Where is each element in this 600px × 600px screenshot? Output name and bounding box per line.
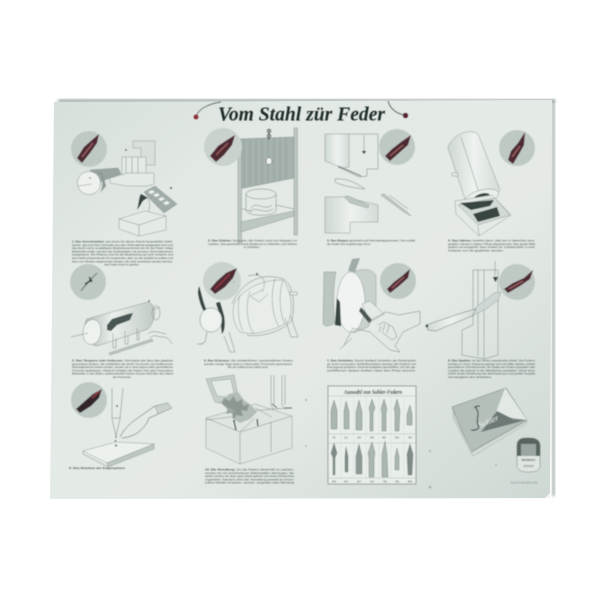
nib labels row 2: 800	[408, 480, 413, 484]
nib row 1	[331, 399, 412, 431]
caption 3: die Feder ihre kuppförmige Form.	[327, 242, 371, 246]
caption 6: werden einige Tage lang in rotierenden Trommeln geschauert.	[204, 362, 293, 366]
product box	[452, 388, 527, 456]
caption 5: gewordene Federn, die schließlich die durch Trommeln mit Gelbbrenner	[72, 362, 173, 366]
caption 8: Genauigkeit des Arbeiters.	[448, 375, 492, 379]
caption 1: 1. Das Ausschneiden: aus einem für diesen Zweck hergestellten Stahl-	[72, 240, 173, 244]
printer's imprint: Druck: Federnfabrik 1951	[511, 482, 539, 484]
caption 7: an hoch tourenden Schleifscheiben werden die Federn zur	[327, 362, 416, 366]
caption 1: Elastizität erhält, werden die Federplatten mit grossen Schneidpressen	[72, 249, 173, 253]
nib labels row 1: 300	[370, 436, 375, 440]
caption 7: schliffenen Spitze Aufbei nach den Prise kommt.	[327, 368, 416, 372]
chart: Auswahl von Sohler-Federn	[328, 386, 416, 484]
caption 8	[448, 358, 535, 379]
caption 10: edlem Metall versehen, worauf, vergoldet oder Messing	[205, 481, 294, 485]
caption 1: aus Feder Kopf zu gießen.	[104, 263, 140, 267]
nib labels row 1: 120	[357, 436, 362, 440]
caption 8: möglich die präzise in der Mittelachse gespalten. Diese feine	[448, 368, 535, 372]
caption 1: kann von Stücken abgesondert werden, die nicht verarbeitet werden können,	[72, 259, 173, 263]
maker's badge: SPHINTIC	[522, 458, 536, 462]
caption 4: Anlasse von 25 geglühter werden.	[448, 248, 504, 252]
step 9: das Drücken der Kugelspitzen	[69, 382, 172, 470]
hanging cord left	[194, 102, 221, 119]
caption 6	[204, 358, 293, 369]
caption 10: werden sie mit verschiedenen Edelmetallen überzogen. Sie	[205, 471, 294, 475]
caption 7: Erzeugung größerer Geschmeidigkeit geschliffen, bis der ge-	[327, 365, 416, 369]
caption 4	[448, 238, 535, 252]
caption 8: werden in einer Fassung gelegt und mit Hilfe starker scharf	[448, 362, 535, 366]
lens: nib 4	[499, 130, 535, 166]
lens: nib 8	[499, 264, 535, 300]
nib labels row 2: 414	[370, 480, 375, 484]
poster sheet	[50, 100, 552, 499]
lens: nib 6	[203, 262, 241, 300]
nib labels row 1: 515	[395, 436, 400, 440]
caption 7: 7. Das Schleifen. Durch dreifach Schleifen der Federspitze	[327, 358, 416, 362]
step 5: das Tempern oder Anlassen	[70, 264, 173, 379]
nib labels row 1: 360	[382, 436, 387, 440]
lens: nib 7	[380, 263, 416, 299]
step 4: das Härten	[448, 130, 535, 252]
maker's badge: SOHLER	[523, 465, 534, 468]
nib labels row 2	[332, 480, 413, 484]
caption 3: 3. Das Biegen geschieht auf Kleinstprägepressen, ihre erhält	[327, 238, 415, 242]
caption 5: Elastizität. In den Edlen, außerordentlich feinen Kurven wird über den Stand	[72, 372, 173, 376]
hanging cord right	[388, 101, 408, 118]
step 2: das Glühen	[204, 128, 298, 249]
caption 5: der Feuerzeit.	[113, 375, 131, 379]
caption 2: 2. Das Glühen: Nunmehr, die Federn sind nun biegsam zu	[208, 238, 297, 242]
nib labels row 2: 780	[395, 480, 400, 484]
nib labels row 1: 111	[344, 436, 349, 440]
maker's badge	[517, 438, 540, 472]
caption 1	[72, 240, 173, 267]
step 6: das Scheuern	[197, 262, 298, 369]
caption 8: 8. Das Spalten: ist der letzte maschinelle Arbeit. Die Federn	[448, 358, 535, 362]
nib labels row 2: 407	[357, 480, 362, 484]
caption 1: das durch seine sorgfältigste Bearbeitung bereits die für die Feder nötige	[72, 246, 173, 250]
caption 8: geschliffener Schnittstempel, die Spalte der Federn gespalten das	[448, 365, 535, 369]
caption 5	[72, 358, 173, 379]
caption 7	[327, 358, 416, 372]
caption 10: zugeführt. Danach wird die Veredlung jeweils je einem	[205, 477, 295, 481]
caption 9: 9. Das Drücken der Kugelspitzen	[69, 466, 125, 470]
lens: nib 1	[71, 131, 107, 167]
nib labels row 2: 400	[332, 480, 337, 484]
caption 5: Messingkörbchen befreit wurden, werden sie in einer eigens dafür geschaffenen	[72, 365, 173, 369]
corner wear	[545, 492, 551, 498]
caption 2: machen. Das geschieht durch Erwärmen in Glühöfen und Glühen	[208, 242, 297, 246]
caption 5: 5. Das Tempern oder Anlassen. Vermittels wie dies das glasbart	[72, 358, 173, 362]
caption 1: dem Stahl entsprechende Art vorgerichtet, aber nur die Qualität ist prüfbar und	[72, 256, 173, 260]
caption 4: 4. Das Härten: bewirkt dann, daß sie in Härteöfen aus-	[448, 238, 535, 242]
lens: nib 9	[71, 382, 107, 418]
caption 1: bande, das erst beim Feinwalz aus dem Rohmaterial ausgewalzt wird und	[72, 243, 173, 247]
caption 3	[327, 238, 415, 246]
caption 8: Arbeit fordert Erfahrung des Mechanismus und größte Sorgfalt	[448, 372, 535, 376]
step 10: die Veredlung	[205, 375, 295, 485]
caption 2: in Glühöfen.	[244, 245, 260, 249]
step 3: das Biegen	[325, 129, 415, 246]
step 1: das Ausschneiden	[71, 131, 177, 267]
caption 10	[205, 468, 295, 485]
caption 4: geglüht, hierauf in kaltem Ölbad abgeschreckt. Das große Maß	[448, 242, 535, 246]
step 7: das Schleifen	[323, 258, 420, 372]
lens: nib 5	[70, 264, 106, 300]
caption 6: Sie sie vollkommen blank sind.	[227, 365, 269, 369]
nib labels row 2: 700	[383, 480, 388, 484]
paper speckles	[233, 281, 497, 488]
caption 10: sehen werden sie dann ganz blank gebeizt und einem Rostschutz	[205, 474, 295, 478]
caption 5: Trommel angelassen. Dadurch erhalten die Federn ihre ganz besondere	[72, 368, 173, 372]
chart title: Auswahl von Sohler-Federn	[343, 389, 402, 396]
caption 10: 10. Die Veredlung: Um die Federn dauerhaft zu machen,	[205, 468, 294, 472]
caption 1: ausgestanzt. Die Platinen sind für die Bearbeitung auf sehr einfache und	[72, 253, 173, 257]
nib row 2	[331, 441, 413, 477]
caption 4: geglüht und ausgekühlt. Dann erhalten sie "Lötkolbenhärte" in einer	[448, 245, 535, 249]
nib labels row 1	[333, 436, 413, 440]
caption 6: 6. Das Scheuern. Die schwärzlichen, ausscheidfreien Federn	[204, 358, 293, 362]
caption 2	[208, 238, 297, 249]
nib labels row 1: 50	[333, 436, 336, 440]
title: Vom Stahl zür Feder	[218, 104, 385, 126]
lens: nib 2	[204, 128, 242, 166]
nib labels row 1: 790	[408, 436, 413, 440]
step 8: das Spalten	[426, 261, 535, 379]
nib labels row 2: 404	[344, 480, 349, 484]
lens: nib 3	[379, 129, 415, 165]
product box: Sohler	[477, 413, 501, 430]
